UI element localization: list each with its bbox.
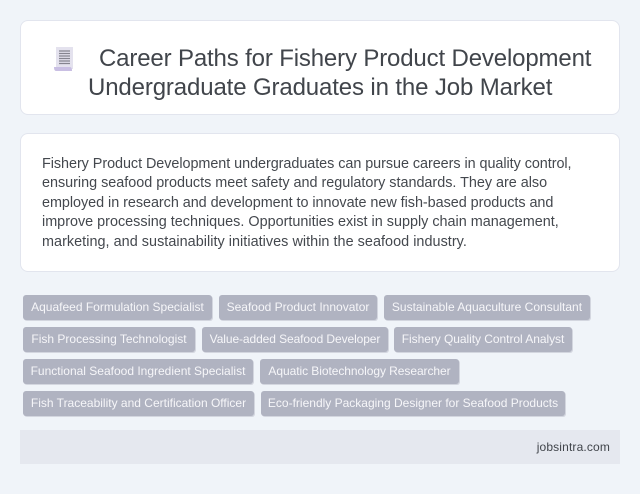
footer bar [20, 430, 620, 464]
tag [219, 295, 377, 320]
title [88, 45, 592, 101]
icon: document scroll [54, 47, 73, 71]
tag: Fish Traceability and Certification Officer [31, 396, 246, 410]
description panel [20, 133, 620, 272]
tag: Aquafeed Formulation Specialist [31, 300, 204, 314]
tag [260, 359, 459, 384]
tag [23, 359, 253, 384]
title: Career Paths for Fishery Product Development [99, 45, 591, 72]
header panel [20, 20, 620, 115]
description text: Fishery Product Development undergraduates can pursue careers in quality control, [42, 156, 572, 172]
tag [23, 295, 212, 320]
tag [261, 391, 565, 416]
description text [42, 156, 572, 250]
tag: Seafood Product Innovator [227, 300, 369, 314]
footer source text: jobsintra.com [537, 440, 610, 454]
tag: Functional Seafood Ingredient Specialist [31, 364, 245, 378]
tag [394, 327, 572, 352]
tag: Fish Processing Technologist [31, 332, 187, 346]
tag [384, 295, 590, 320]
description text: improve processing techniques. Opportunities exist in supply chain management, [42, 214, 559, 230]
title: Undergraduate Graduates in the Job Market [88, 74, 552, 101]
tag [23, 391, 254, 416]
tag: Eco-friendly Packaging Designer for Seafood Products [268, 396, 558, 410]
tag: Sustainable Aquaculture Consultant [392, 300, 582, 314]
description text: ensuring seafood products meet safety and regulatory standards. They are also [42, 175, 547, 191]
description text: marketing, and sustainability initiatives within the seafood industry. [42, 234, 467, 250]
tag: Aquatic Biotechnology Researcher [268, 364, 451, 378]
tag: Fishery Quality Control Analyst [402, 332, 564, 346]
tag [23, 327, 195, 352]
description text: employed in research and development to innovate new fish-based products and [42, 195, 553, 211]
tag [202, 327, 388, 352]
career tags [23, 295, 591, 417]
tag: Value-added Seafood Developer [210, 332, 380, 346]
